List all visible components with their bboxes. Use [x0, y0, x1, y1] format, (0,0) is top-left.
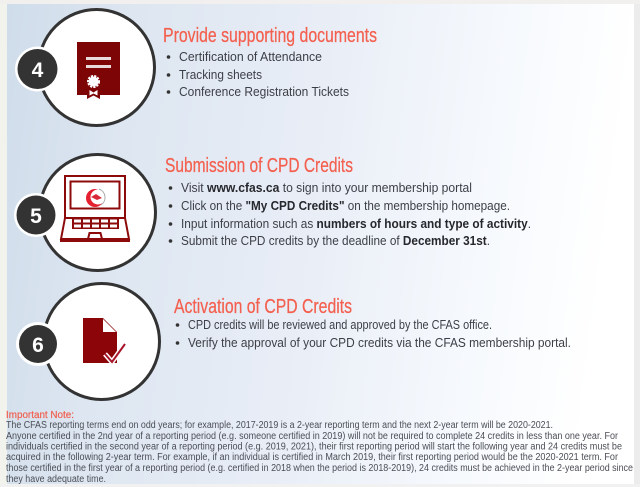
circle: step 5 [40, 154, 156, 270]
note body [6, 420, 633, 485]
badge: number 5 [14, 193, 58, 237]
bullet list: submission steps: Submit the CPD credits by the deadline of December 31st. [181, 233, 490, 248]
note body: they have adequate time. [6, 474, 106, 485]
bullet list: submission steps [169, 180, 531, 248]
bullet list: activation: Verify the approval of your CPD credits via the CFAS membership portal. [188, 335, 571, 350]
circle: step 4 [38, 10, 154, 126]
heading: submission of cpd credits: Submission of CPD Credits [165, 155, 353, 177]
step 5 [14, 154, 531, 270]
bullet list: documents: Conference Registration Tickets [179, 84, 349, 99]
bullet list: submission steps: Click on the "My CPD Credits" on the membership homepage. [181, 198, 510, 213]
icon: approved document [83, 318, 125, 363]
icon: certificate [77, 42, 120, 99]
heading: activation of cpd credits: Activation of CPD Credits [174, 296, 352, 318]
bullet list: activation [176, 317, 571, 350]
badge: number 4 [15, 46, 60, 92]
note heading: Important Note: [6, 410, 74, 421]
bullet list: activation: CPD credits will be reviewed and approved by the CFAS office. [188, 317, 492, 332]
step 6 [16, 284, 571, 400]
badge: number 5: 5 [30, 205, 42, 228]
bullet list: documents: Tracking sheets [179, 67, 262, 82]
badge: number 6 [16, 322, 60, 366]
icon: laptop [60, 176, 130, 242]
bullet list: submission steps: Input information such as numbers of hours and type of activity. [181, 216, 531, 231]
badge: number 6: 6 [32, 334, 44, 357]
bullet list: documents [167, 49, 349, 99]
bullet list: submission steps: Visit www.cfas.ca to sign into your membership portal [181, 180, 472, 195]
badge: number 4: 4 [32, 59, 44, 82]
icon: globe logo [86, 189, 106, 207]
circle: step 6 [44, 284, 160, 400]
note: important note [6, 410, 633, 485]
heading: provide supporting documents: Provide supporting documents [163, 25, 377, 47]
note body: The CFAS reporting terms end on odd years; for example, 2017-2019 is a 2-year reporting term and the next 2-year term will be 2020-2021. [6, 420, 553, 431]
bullet list: documents: Certification of Attendance [179, 49, 322, 64]
step 4 [15, 10, 377, 126]
